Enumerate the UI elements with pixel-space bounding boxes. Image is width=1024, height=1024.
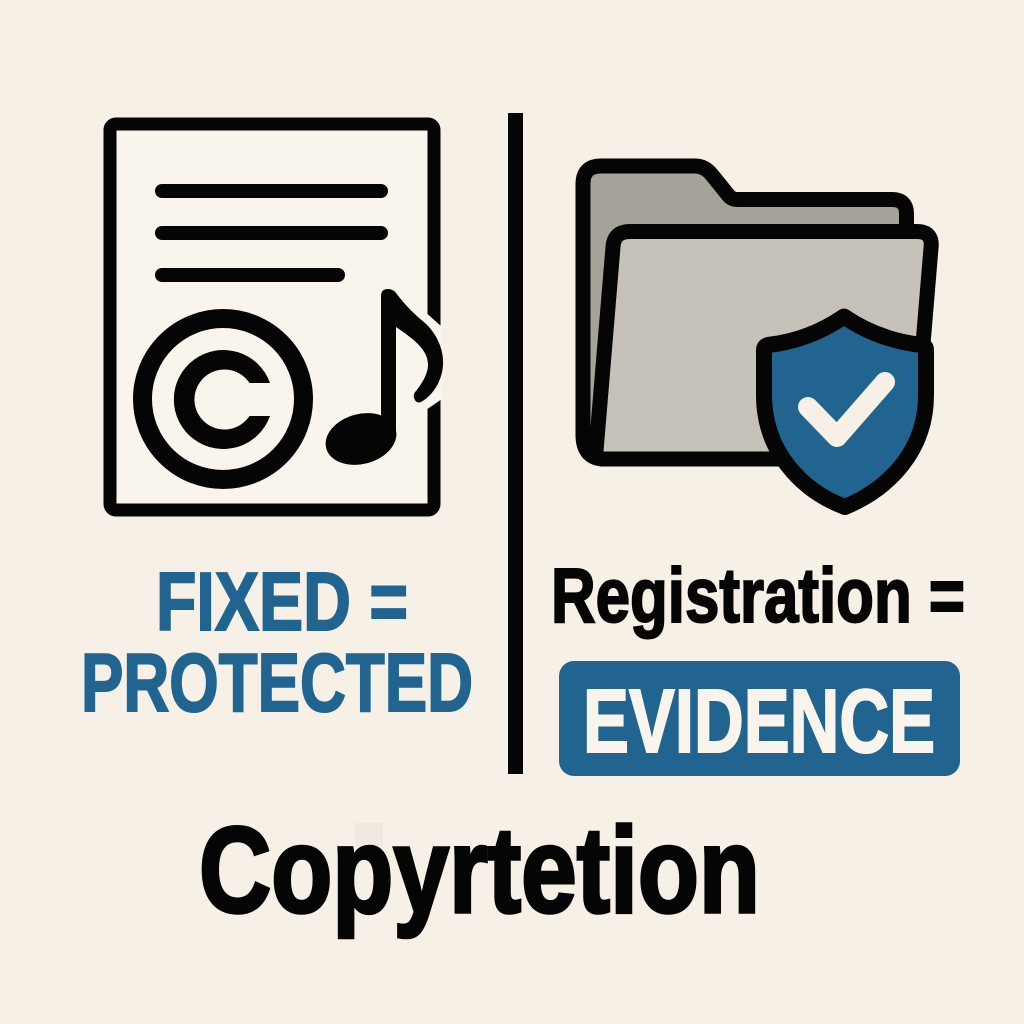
heading: fixed equals protected: PROTECTED [81,636,473,729]
back folder fill [583,166,906,450]
center divider [508,113,523,774]
icon: folder with shield [583,166,931,507]
shield [764,316,926,507]
heading: fixed equals protected: FIXED = [156,555,408,648]
text lines [162,191,381,275]
icon: document with copyright and music note [110,124,443,510]
faint smudge above title [355,823,383,847]
document page [110,124,434,510]
front folder [596,232,931,459]
music note [320,289,443,472]
back folder outline [583,166,906,459]
heading: fixed equals protected [81,555,473,729]
footer title: Copyrtetion [199,802,760,938]
check mark [808,382,885,437]
copyright symbol [142,318,304,480]
